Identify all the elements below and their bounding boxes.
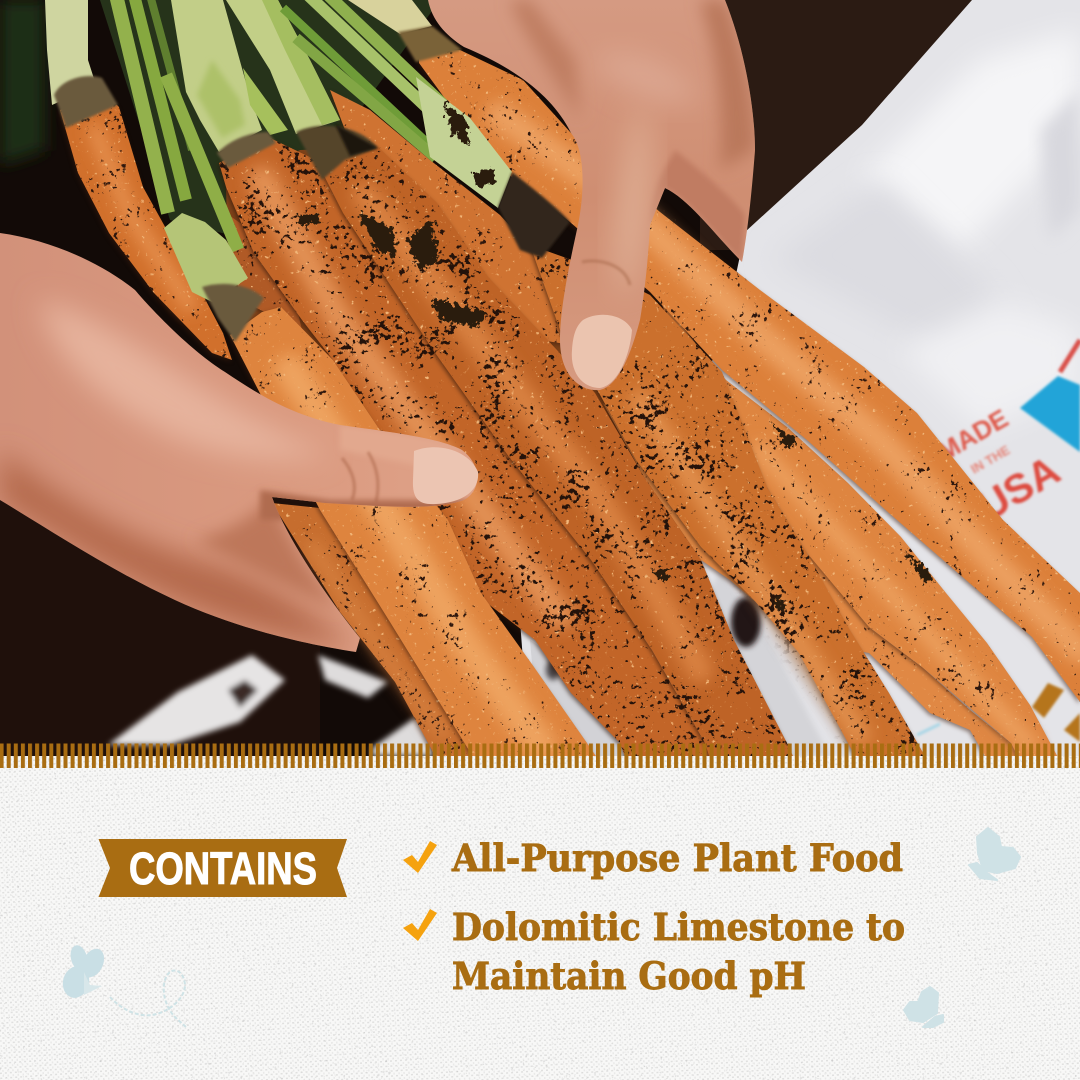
left hand	[0, 233, 478, 652]
orange under-layer between carrots	[226, 147, 722, 632]
linen background	[0, 756, 1080, 1080]
soil-covered bag patches, bottom left	[108, 655, 436, 756]
carrot: front carrot under thumb	[230, 307, 602, 765]
icon: butterfly, upper right	[969, 828, 1020, 880]
bag print: made in the USA: MADE	[932, 403, 1013, 467]
icon: check mark	[403, 841, 437, 873]
stitched fringe	[0, 744, 1080, 768]
checklist item: dolomitic limestone: Dolomitic Limestone to	[452, 905, 905, 949]
background: dark soil	[0, 0, 1080, 756]
checklist item: all-purpose plant food: All-Purpose Plant Food	[451, 836, 903, 880]
icon: check mark	[403, 909, 437, 941]
dark foliage behind stems	[100, 0, 440, 240]
right hand	[428, 0, 755, 390]
carrot: left centre carrot	[219, 137, 717, 765]
white fertilizer bag	[520, 0, 1080, 756]
carrot: small back carrots	[226, 90, 1028, 765]
checklist item: dolomitic limestone: Maintain Good pH	[452, 954, 806, 998]
carrot: top far left	[60, 90, 232, 360]
carrot: far right lower	[660, 300, 1062, 765]
bag print: made in the USA: IN THE	[968, 442, 1013, 477]
carrot: centre right dirty carrot	[530, 245, 930, 765]
thumb nail, left hand	[413, 447, 478, 504]
soil clumps	[296, 102, 935, 616]
icon: bee with dashed flight trail	[59, 943, 187, 1028]
carrot: lower left thin carrot	[272, 503, 497, 765]
carrot: centre carrot	[316, 147, 797, 765]
carrot greens and stems	[45, 0, 512, 302]
bag print: made in the USA: USA	[970, 447, 1067, 530]
thumb nail, right hand	[572, 315, 632, 388]
bag print: made in the USA	[917, 340, 1080, 742]
carrot: long top right carrot	[419, 48, 1080, 702]
icon: butterfly, lower right	[904, 987, 943, 1027]
carrot crowns with soil	[54, 26, 570, 342]
checklist item: dolomitic limestone	[403, 905, 905, 998]
photo: hands holding freshly harvested carrots	[0, 0, 1080, 756]
ribbon: contains: CONTAINS	[129, 843, 317, 894]
